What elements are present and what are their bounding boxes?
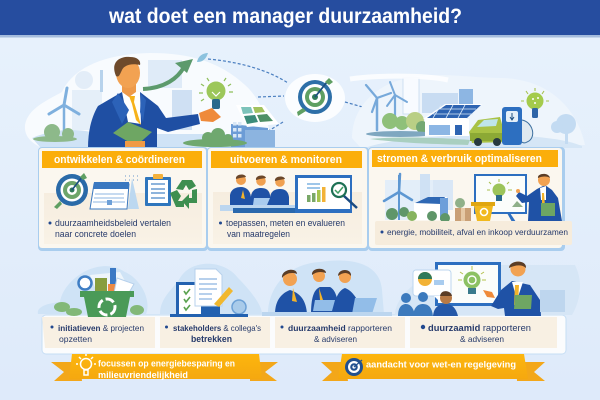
- panel heading: stromen & verbruik optimaliseren: [377, 153, 542, 165]
- text block: van maatregelen: [227, 229, 290, 239]
- text block: [48, 218, 171, 239]
- title banner: [0, 0, 600, 38]
- callout ribbon: energiebesparing: focussen op energiebesparing en: [98, 358, 235, 370]
- callout ribbon: wet- en regelgeving: aandacht voor wet-en regelgeving: [366, 360, 516, 370]
- callout ribbon: wet- en regelgeving: [321, 354, 545, 381]
- text block: [421, 323, 531, 344]
- yellow recycling bin: [471, 202, 495, 221]
- light bulb: [521, 88, 549, 118]
- text block: & adviseren: [314, 334, 357, 344]
- hero illustration: target: [285, 74, 345, 122]
- manager figure: [88, 57, 221, 148]
- electric car: [469, 117, 507, 146]
- building with solar panel: [231, 105, 279, 147]
- text block: [280, 323, 392, 344]
- panel heading: [372, 150, 558, 167]
- callout ribbon: energiebesparing: milieuvriendelijkheid: [98, 370, 188, 381]
- text block: [165, 323, 261, 344]
- icon: clipboard checklist: [145, 174, 171, 206]
- text block: stakeholders & collega's: [173, 323, 261, 333]
- icon: target: [345, 358, 363, 376]
- card: duurzaamheid rapporteren: [262, 260, 405, 348]
- hero illustration: right scene: [350, 75, 585, 148]
- panel heading: ontwikkelen & coördineren: [54, 154, 185, 166]
- text block: naar concrete doelen: [55, 229, 136, 239]
- panel: uitvoeren en monitoren: [207, 147, 369, 251]
- parcel and recycling bin: [455, 198, 471, 221]
- text block: initiatieven & projecten: [58, 323, 144, 333]
- card: duurzaamid rapporteren: [395, 262, 580, 348]
- documents illustration: [160, 264, 262, 317]
- text block: duurzaamheid rapporteren: [288, 323, 392, 333]
- shrubs: [183, 128, 247, 147]
- trees: [33, 124, 77, 142]
- presentation illustration: [395, 262, 580, 316]
- icon: light bulb outline: [76, 354, 96, 375]
- dotted connector lines: [208, 59, 366, 135]
- panel heading: [211, 151, 362, 168]
- title banner: wat doet een manager duurzaamheid?: [108, 5, 462, 28]
- tree silhouette: [551, 114, 576, 144]
- text block: duurzaamheidsbeleid vertalen: [55, 218, 171, 228]
- team at laptops: [220, 175, 318, 213]
- icon: target: [54, 173, 88, 209]
- panel: stromen en verbruik optimaliseren: [368, 147, 580, 251]
- wind turbines: [366, 82, 407, 130]
- text block: opzetten: [59, 334, 92, 344]
- colleagues meeting illustration: [262, 260, 392, 316]
- monitor with magnifier: [295, 175, 357, 213]
- road: [370, 137, 470, 145]
- panel: ontwikkelen en coördineren: [38, 147, 208, 251]
- city and wind scene: [384, 174, 453, 223]
- icon: wind turbine: [49, 88, 79, 136]
- card: stakeholders: [160, 264, 270, 348]
- icon: calendar: [90, 176, 139, 209]
- text block: & adviseren: [460, 334, 504, 344]
- card: initiatieven: [38, 266, 155, 348]
- text block: [219, 218, 345, 239]
- callout ribbon: energiebesparing: [51, 354, 278, 381]
- presentation board: [474, 174, 527, 222]
- hero illustration: left scene: [25, 53, 366, 148]
- trees: [366, 112, 434, 137]
- panel heading: uitvoeren & monitoren: [230, 154, 342, 166]
- presenter figure: [516, 174, 562, 221]
- bottom panel: action strip: [38, 260, 580, 354]
- icon: recycle: [170, 180, 197, 209]
- text block: [50, 323, 144, 344]
- panel heading: [42, 151, 202, 168]
- text block: betrekken: [191, 334, 232, 344]
- recycling bin illustration: [38, 266, 148, 317]
- growth arrow: [143, 53, 208, 89]
- text block: energie, mobiliteit, afval en inkoop verduurzamen: [387, 227, 568, 237]
- text block: duurzaamid rapporteren: [428, 323, 531, 333]
- icon: light bulb: [199, 78, 233, 109]
- charging station: [502, 107, 533, 145]
- solar house: [423, 104, 482, 136]
- text block: toepassen, meten en evalueren: [226, 218, 345, 228]
